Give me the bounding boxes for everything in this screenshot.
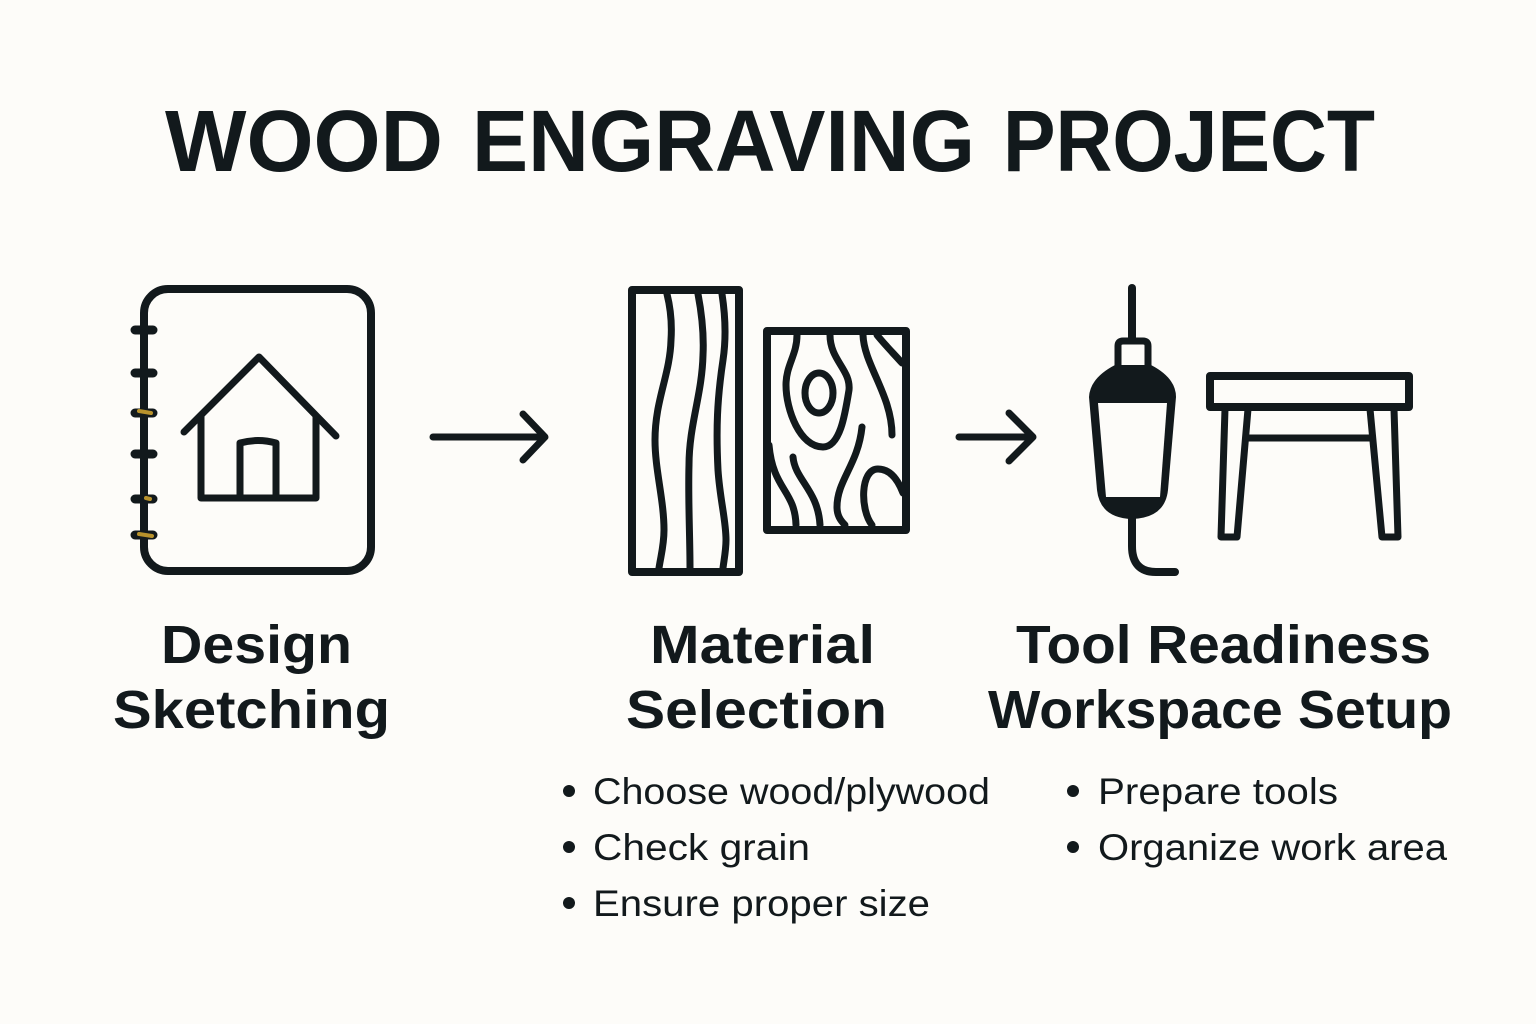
heading: material selection: Selection [626,680,887,740]
spiral binding rings [135,330,153,536]
title [165,93,1375,190]
heading: design sketching: Design [161,615,352,675]
heading: tool readiness and workspace setup [988,615,1452,740]
list: tool and workspace steps: Organize work area [1098,827,1447,868]
list: material selection steps: Ensure proper size [593,883,930,924]
title: ENGRAVING [472,93,975,190]
icon: sketchbook with house [135,289,371,571]
heading: design sketching [113,615,390,740]
list: material selection steps: Check grain [593,827,810,868]
icon: wood panel with knot grain [767,331,906,530]
title: WOOD [165,93,443,190]
list: tool and workspace steps: Prepare tools [1098,771,1338,812]
arrow: material to tools [959,413,1033,461]
icon: workbench table [1210,376,1409,537]
heading: material selection [626,615,887,740]
list: material selection steps [563,771,990,924]
heading: tool readiness and workspace setup: Workspace Setup [988,680,1452,740]
house drawing [184,357,336,498]
arrow: design to material [433,414,545,460]
icon: wood plank with straight grain [632,290,739,572]
heading: design sketching: Sketching [113,680,390,740]
heading: material selection: Material [650,615,875,675]
list: material selection steps: Choose wood/plywood [593,771,990,812]
heading: tool readiness and workspace setup: Tool Readiness [1016,615,1431,675]
list: tool and workspace steps [1067,771,1447,868]
icon: rotary engraving tool [1089,288,1176,572]
title: PROJECT [1003,93,1375,190]
